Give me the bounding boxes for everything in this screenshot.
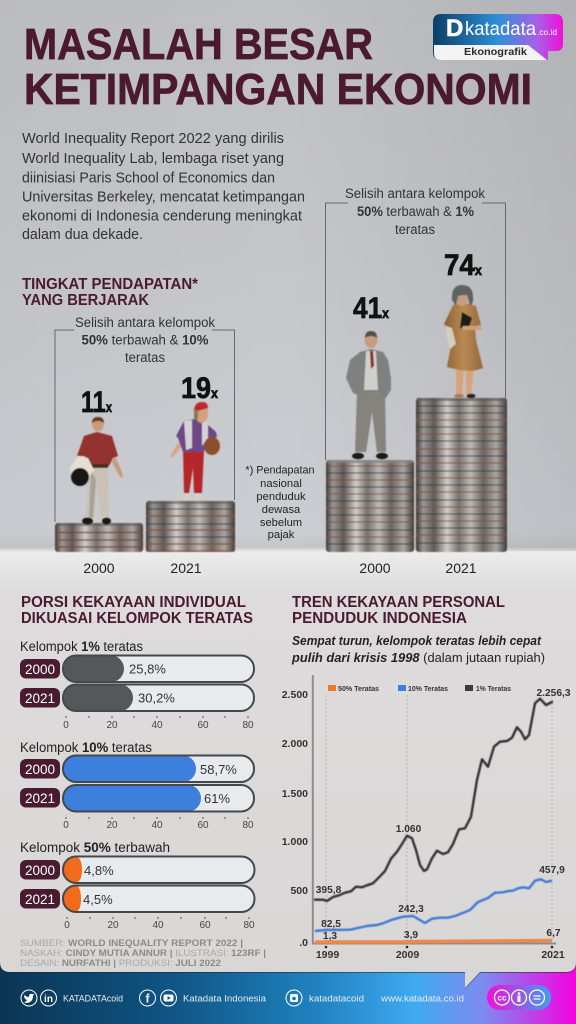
x axis labels bbox=[316, 949, 565, 961]
coin stack 2000 right bbox=[326, 460, 414, 552]
bar group: 1 percent: 2021 bbox=[25, 691, 55, 706]
y axis labels: .0 bbox=[299, 937, 308, 949]
bar group: 50 percent: 4,8% bbox=[84, 863, 114, 878]
footnote: penduduk bbox=[256, 491, 306, 503]
chart subtitle: pulih dari krisis 1998 (dalam jutaan rupiah) bbox=[291, 650, 545, 665]
title: KETIMPANGAN EKONOMI bbox=[24, 65, 532, 114]
intro paragraph bbox=[22, 131, 305, 243]
bar group: 10 percent: 20 bbox=[106, 820, 118, 831]
footer band bbox=[0, 950, 576, 1024]
caption: 1 percent gap: 50% terbawah & 1% bbox=[357, 204, 474, 219]
bar group: 50 percent: 4,5% bbox=[83, 892, 113, 907]
bar group: 50 percent: 40 bbox=[152, 920, 164, 931]
icon: youtube bbox=[160, 990, 176, 1006]
data labels: 82,5 bbox=[321, 919, 341, 930]
bar group: 50 percent: 0 bbox=[64, 920, 70, 931]
bar group: 50 percent: 20 bbox=[107, 920, 119, 931]
bar group: 1 percent: 80 bbox=[242, 720, 254, 731]
data labels bbox=[316, 688, 571, 942]
chart subtitle bbox=[291, 633, 545, 665]
y axis labels: 2.500 bbox=[282, 689, 308, 701]
heading: tren kekayaan bbox=[292, 594, 505, 627]
footnote: pajak bbox=[268, 529, 295, 541]
icon: facebook bbox=[140, 990, 156, 1006]
heading: tingkat pendapatan: TINGKAT PENDAPATAN* bbox=[22, 276, 199, 293]
bar group: 1 percent: 60 bbox=[197, 720, 209, 731]
figure: person with red cap bbox=[170, 402, 220, 500]
heading: porsi kekayaan: DIKUASAI KELOMPOK TERATAS bbox=[21, 610, 253, 627]
bar group: 10 percent: 60 bbox=[197, 820, 209, 831]
logo: katadata ekonografik: .co.id bbox=[537, 28, 557, 37]
data labels: 2.256,3 bbox=[536, 688, 571, 699]
bar group: 10 percent: 80 bbox=[242, 820, 254, 831]
heading: porsi kekayaan: PORSI KEKAYAAN INDIVIDUAL bbox=[21, 594, 246, 611]
x axis labels: 2021 bbox=[541, 949, 565, 961]
x axis labels: 2009 bbox=[396, 949, 419, 961]
bar group: 10 percent bbox=[20, 740, 254, 831]
caption: 10 percent gap bbox=[75, 315, 215, 365]
intro paragraph: World Inequality Lab, lembaga riset yang bbox=[22, 151, 284, 167]
value 74x: 74x bbox=[444, 249, 482, 282]
bar group: 1 percent: 40 bbox=[151, 720, 163, 731]
icon: instagram bbox=[286, 990, 302, 1006]
year labels for stacks bbox=[83, 560, 477, 576]
data labels: 1,3 bbox=[323, 931, 337, 942]
bracket 1 percent bbox=[326, 203, 506, 460]
year labels for stacks: 2021 bbox=[445, 560, 477, 576]
figure: man in grey suit bbox=[346, 331, 391, 459]
bar group: 10 percent: 0 bbox=[63, 820, 69, 831]
bar group: 10 percent: 2021 bbox=[25, 791, 55, 806]
heading: tren kekayaan: PENDUDUK INDONESIA bbox=[292, 610, 467, 627]
title: MASALAH BESAR bbox=[24, 20, 373, 69]
icon: linkedin bbox=[40, 990, 56, 1006]
bar group: 1 percent: 25,8% bbox=[129, 662, 166, 676]
caption: 10 percent gap: 50% terbawah & 10% bbox=[82, 332, 208, 348]
data labels: 242,3 bbox=[398, 904, 424, 915]
heading: porsi kekayaan bbox=[21, 594, 253, 627]
footer socials: Katadata Indonesia bbox=[183, 994, 267, 1004]
footer socials: KATADATAcoid bbox=[63, 994, 123, 1004]
coin stack 2000 left bbox=[55, 523, 143, 552]
bar group: 50 percent bbox=[20, 840, 255, 931]
intro paragraph: diinisiasi Paris School of Economics dan bbox=[22, 170, 275, 186]
caption: 1 percent gap bbox=[345, 186, 485, 237]
bar group: 10 percent: 61% bbox=[204, 791, 230, 806]
bar group: 10 percent: 40 bbox=[151, 820, 163, 831]
heading: tren kekayaan: TREN KEKAYAAN PERSONAL bbox=[292, 594, 505, 611]
data labels: 3,9 bbox=[404, 930, 418, 941]
source credits bbox=[20, 938, 266, 969]
bar group: 50 percent: Kelompok 50% terbawah bbox=[20, 840, 170, 855]
bar group: 50 percent: 80 bbox=[243, 920, 255, 931]
y axis labels: 1.500 bbox=[282, 788, 308, 800]
coin stack 2021 left bbox=[146, 501, 235, 552]
figure: woman in brown dress bbox=[444, 285, 483, 398]
bar group: 50 percent: 60 bbox=[199, 920, 211, 931]
y axis labels: 2.000 bbox=[282, 738, 308, 750]
icon: facebook: f bbox=[146, 992, 150, 1006]
footnote: sebelum bbox=[260, 517, 302, 529]
icon: twitter bbox=[21, 990, 37, 1006]
year labels for stacks: 2000 bbox=[83, 560, 115, 576]
intro paragraph: ekonomi di Indonesia cenderung meningkat bbox=[22, 208, 302, 224]
caption: 1 percent gap: teratas bbox=[395, 222, 435, 237]
value 19x: 19x bbox=[181, 372, 218, 405]
heading: tingkat pendapatan: YANG BERJARAK bbox=[22, 292, 150, 309]
creative commons badge bbox=[487, 985, 551, 1010]
creative commons badge: cc bbox=[498, 994, 507, 1002]
bar group: 1 percent bbox=[20, 639, 254, 731]
title bbox=[24, 20, 532, 114]
value 41x: 41x bbox=[353, 292, 389, 325]
value 11x: 11x bbox=[81, 386, 112, 419]
line chart bbox=[282, 675, 571, 961]
logo: katadata ekonografik: D bbox=[446, 15, 463, 42]
coin stack 2021 right bbox=[416, 398, 507, 552]
bar group: 10 percent: 2000 bbox=[25, 762, 55, 777]
y axis labels: 500 bbox=[290, 885, 308, 897]
y axis labels: 1.000 bbox=[282, 836, 308, 848]
bar group: 1 percent: 2000 bbox=[25, 662, 55, 677]
footer socials bbox=[21, 990, 464, 1006]
intro paragraph: World Inequality Report 2022 yang dirilis bbox=[22, 131, 284, 147]
footnote: *) Pendapatan bbox=[246, 464, 314, 476]
source credits: SUMBER: WORLD INEQUALITY REPORT 2022 | bbox=[20, 938, 243, 949]
intro paragraph: dalam dua dekade. bbox=[22, 227, 143, 243]
logo: katadata ekonografik bbox=[433, 14, 563, 60]
footnote: dewasa bbox=[262, 504, 301, 516]
intro paragraph: Universitas Berkeley, mencatat ketimpangan bbox=[22, 190, 305, 206]
bar group: 50 percent: 2021 bbox=[25, 892, 55, 907]
footnote: nasional bbox=[260, 478, 302, 490]
year labels for stacks: 2000 bbox=[359, 560, 391, 576]
source credits: DESAIN: NURFATHI | PRODUKSI: JULI 2022 bbox=[20, 958, 221, 969]
footer socials: katadatacoid bbox=[309, 994, 364, 1004]
source credits: NASKAH: CINDY MUTIA ANNUR | ILUSTRASI: 123RF | bbox=[20, 948, 266, 959]
caption: 10 percent gap: Selisih antara kelompok bbox=[75, 315, 215, 330]
bar group: 1 percent: 0 bbox=[63, 720, 69, 731]
bar group: 50 percent: 2000 bbox=[25, 863, 55, 878]
heading: tingkat pendapatan bbox=[22, 276, 199, 309]
footer socials: www.katadata.co.id bbox=[380, 994, 464, 1004]
bar group: 1 percent: 30,2% bbox=[138, 690, 175, 706]
bar group: 1 percent: Kelompok 1% teratas bbox=[20, 639, 143, 654]
bar group: 1 percent: 20 bbox=[106, 720, 118, 731]
legend: 50% Teratas bbox=[338, 684, 379, 693]
y axis labels bbox=[282, 689, 308, 949]
year labels for stacks: 2021 bbox=[170, 560, 202, 576]
legend bbox=[328, 684, 511, 693]
caption: 10 percent gap: teratas bbox=[125, 350, 165, 365]
figure: man in red shirt bbox=[70, 416, 123, 524]
chart subtitle: Sempat turun, kelompok teratas lebih cepat bbox=[292, 633, 542, 648]
legend: 10% Teratas bbox=[408, 684, 448, 693]
logo: katadata ekonografik: Ekonografik bbox=[464, 46, 527, 58]
data labels: 457,9 bbox=[539, 865, 565, 876]
bar group: 10 percent: Kelompok 10% teratas bbox=[20, 740, 152, 755]
logo: katadata ekonografik: katadata bbox=[465, 18, 536, 40]
bracket 10 percent bbox=[55, 330, 234, 522]
footnote bbox=[246, 464, 314, 541]
legend: 1% Teratas bbox=[476, 684, 511, 693]
bar group: 10 percent: 58,7% bbox=[200, 762, 237, 777]
icon: linkedin: in bbox=[44, 994, 53, 1005]
data labels: 395,8 bbox=[316, 885, 342, 896]
x axis labels: 1999 bbox=[316, 949, 339, 961]
data labels: 1.060 bbox=[396, 824, 422, 835]
data labels: 6,7 bbox=[546, 928, 561, 939]
caption: 1 percent gap: Selisih antara kelompok bbox=[345, 186, 485, 201]
